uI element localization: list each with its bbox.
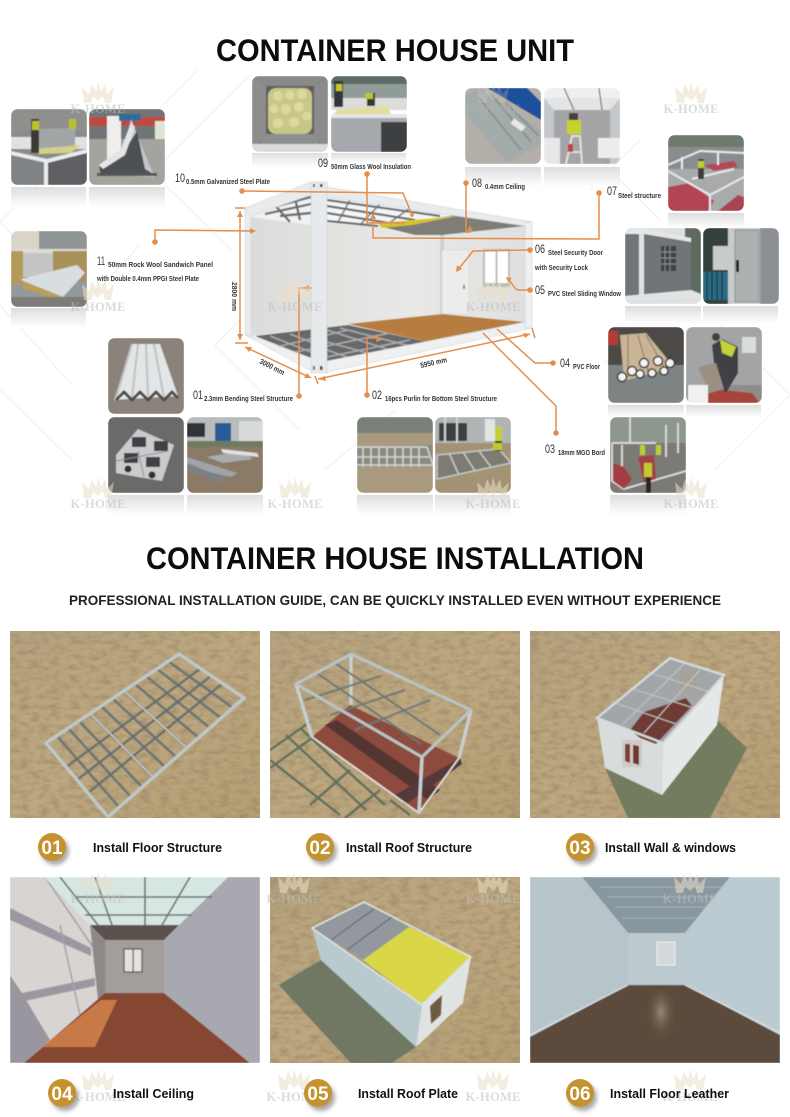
label 02 xyxy=(372,388,497,403)
main diagram: container house cutaway xyxy=(245,182,532,373)
step 03 caption xyxy=(566,833,736,865)
step 03 caption: Install Wall & windows xyxy=(605,840,736,855)
dimension: length 5950 mm: 5950 mm xyxy=(419,355,448,370)
label 11: with Double 0.4mm PPGI Steel Plate xyxy=(96,274,199,283)
K-HOME watermarks: K-HOME xyxy=(662,1090,718,1104)
floor steel grid xyxy=(255,325,428,361)
step 05 caption: Install Roof Plate xyxy=(358,1086,458,1101)
label 05 xyxy=(535,283,621,298)
K-HOME watermarks xyxy=(70,82,718,1104)
label 04 xyxy=(560,356,600,371)
photo: steel parts on the yard xyxy=(187,417,263,493)
K-HOME watermarks: K-HOME xyxy=(266,1090,322,1104)
step 01 image: floor structure on sand xyxy=(10,631,260,818)
roof beams and posts xyxy=(245,182,532,373)
back wall corner shading xyxy=(440,233,444,314)
step 03 caption: 03 xyxy=(569,838,591,859)
K-HOME watermarks: K-HOME xyxy=(466,497,520,511)
label 01 xyxy=(193,388,293,403)
label 11: 50mm Rock Wool Sandwich Panel xyxy=(108,260,213,269)
label 10: 10 xyxy=(175,171,185,185)
K-HOME watermarks: K-HOME xyxy=(662,892,718,906)
security door xyxy=(442,250,469,314)
roof purlins left of post xyxy=(251,195,311,225)
photo: workers assembling floor xyxy=(435,417,511,493)
K-HOME watermarks: K-HOME xyxy=(466,1090,520,1104)
photo: stacked steel plates on pallet xyxy=(89,109,165,185)
step 06 image: finished interior with wood floor xyxy=(530,877,780,1063)
callout line 10 xyxy=(239,188,414,217)
label 03 xyxy=(545,442,605,457)
step 04 caption xyxy=(48,1079,194,1111)
K-HOME watermarks: K-HOME xyxy=(466,102,520,116)
dimension: height 2800 mm xyxy=(230,208,248,343)
label 09: 09 xyxy=(318,156,328,170)
photo reflections xyxy=(11,153,778,515)
step 04 image: interior with glass roof xyxy=(10,877,260,1063)
photo: container exterior with window xyxy=(625,228,701,304)
label 04: PVC Floor xyxy=(573,362,600,371)
dimension: length 5950 mm xyxy=(315,328,535,384)
callout line 08 xyxy=(463,180,473,232)
subtitle: installation guide: PROFESSIONAL INSTALLATION GUIDE, CAN BE QUICKLY INSTALLED EVEN WITHOUT EXPERIENCE xyxy=(69,592,721,608)
step 06 caption xyxy=(566,1079,729,1111)
K-HOME watermarks: K-HOME xyxy=(70,1090,126,1104)
dimension: height 2800 mm: 2800 mm xyxy=(230,282,239,311)
callout line 11 xyxy=(152,228,256,245)
step 02 caption: 02 xyxy=(309,838,331,859)
photo: security door xyxy=(703,228,779,304)
title: container house installation: CONTAINER HOUSE INSTALLATION xyxy=(146,540,644,576)
label 07: 07 xyxy=(607,184,617,198)
K-HOME watermarks: K-HOME xyxy=(266,892,322,906)
label 11 xyxy=(96,254,213,283)
photo: PVC floor rolls xyxy=(608,327,684,403)
label 06: with Security Lock xyxy=(534,263,589,272)
label 06 xyxy=(534,242,603,272)
photo: rock wool sandwich panel xyxy=(11,231,87,307)
label 06: Steel Security Door xyxy=(548,248,603,257)
step 05 caption xyxy=(304,1079,458,1111)
step 05 image: roof plate with insulation xyxy=(270,877,520,1063)
photo: worker lifting wall panel xyxy=(11,109,87,185)
callout line 07 xyxy=(370,190,602,239)
callout line 06 xyxy=(456,247,533,272)
photo: worker laying PVC floor xyxy=(686,327,762,403)
callout line 09 xyxy=(364,171,405,223)
K-HOME watermarks: K-HOME xyxy=(70,892,126,906)
long interior wall xyxy=(251,217,525,336)
K-HOME watermarks: K-HOME xyxy=(70,497,126,511)
label 03: 03 xyxy=(545,442,555,456)
photo: bending steel structure profile xyxy=(108,338,184,414)
ceiling panel xyxy=(378,215,525,235)
label 05: PVC Steel Sliding Window xyxy=(548,289,621,298)
label 05: 05 xyxy=(535,283,545,297)
floor bottom beams xyxy=(245,322,532,373)
K-HOME watermarks: K-HOME xyxy=(664,497,718,511)
photo: worker installing ceiling xyxy=(544,88,620,164)
wood PVC floor xyxy=(348,314,525,342)
label 01: 01 xyxy=(193,388,203,402)
step 01 caption: Install Floor Structure xyxy=(93,840,222,855)
label 09: 50mm Glass Wool Insulation xyxy=(331,162,411,171)
step 05 caption: 05 xyxy=(307,1084,329,1105)
callout line 02 xyxy=(364,336,382,398)
callout line 03 xyxy=(483,333,559,436)
photo: workers installing MGO board xyxy=(610,417,686,493)
step 06 caption: Install Floor Leather xyxy=(610,1086,729,1101)
photo: ceiling panels stacked xyxy=(465,88,541,164)
label 08 xyxy=(472,176,525,191)
label 11: 11 xyxy=(97,254,105,268)
step 04 caption: Install Ceiling xyxy=(113,1086,194,1101)
faint background diamond lines xyxy=(0,70,790,470)
photo: steel roof structure with worker xyxy=(668,135,744,211)
label 10: 0.5mm Galvanized Steel Plate xyxy=(186,177,270,186)
label 08: 08 xyxy=(472,176,482,190)
step 06 caption: 06 xyxy=(569,1084,591,1105)
step 01 caption: 01 xyxy=(41,838,63,859)
photo: corner fittings xyxy=(108,417,184,493)
label 07 xyxy=(607,184,661,200)
label 10 xyxy=(175,171,270,186)
roof purlins right of post xyxy=(327,197,458,226)
title: container house unit: CONTAINER HOUSE UNIT xyxy=(216,32,574,68)
step 01 caption xyxy=(38,833,222,865)
step 02 caption xyxy=(306,833,472,865)
callout line 01 xyxy=(296,285,312,399)
step 02 caption: Install Roof Structure xyxy=(346,840,472,855)
step 02 image: roof frame and floor xyxy=(270,631,520,818)
yellow glass wool band xyxy=(378,216,458,228)
step 03 image: walls and windows xyxy=(530,631,780,818)
step 04 caption: 04 xyxy=(51,1084,73,1105)
callout line 04 xyxy=(497,329,556,366)
label 03: 18mm MGO Bord xyxy=(558,448,605,457)
K-HOME watermarks: K-HOME xyxy=(70,102,126,116)
label 07: Steel structure xyxy=(618,191,661,200)
label 04: 04 xyxy=(560,356,570,370)
sliding window xyxy=(483,249,510,287)
dimension: width 3000 mm: 3000 mm xyxy=(258,357,286,377)
photo: workers laying wool on roof xyxy=(331,76,407,152)
photo: purlin frames on ground xyxy=(357,417,433,493)
K-HOME watermarks: K-HOME xyxy=(466,300,520,314)
label 02: 16pcs Purlin for Bottom Steel Structure xyxy=(385,394,497,403)
photo: glass wool rolls in container xyxy=(252,76,328,152)
label 09 xyxy=(318,156,411,171)
callout line 05 xyxy=(506,277,533,293)
label 01: 2.3mm Bending Steel Structure xyxy=(204,394,293,403)
K-HOME watermarks: K-HOME xyxy=(268,497,322,511)
label 08: 0.4mm Ceiling xyxy=(485,182,525,191)
dimension: width 3000 mm xyxy=(245,347,311,378)
K-HOME watermarks: K-HOME xyxy=(70,300,126,314)
K-HOME watermarks: K-HOME xyxy=(268,300,322,314)
K-HOME watermarks: K-HOME xyxy=(466,892,520,906)
K-HOME watermarks: K-HOME xyxy=(664,102,718,116)
label 02: 02 xyxy=(372,388,382,402)
label 06: 06 xyxy=(535,242,545,256)
